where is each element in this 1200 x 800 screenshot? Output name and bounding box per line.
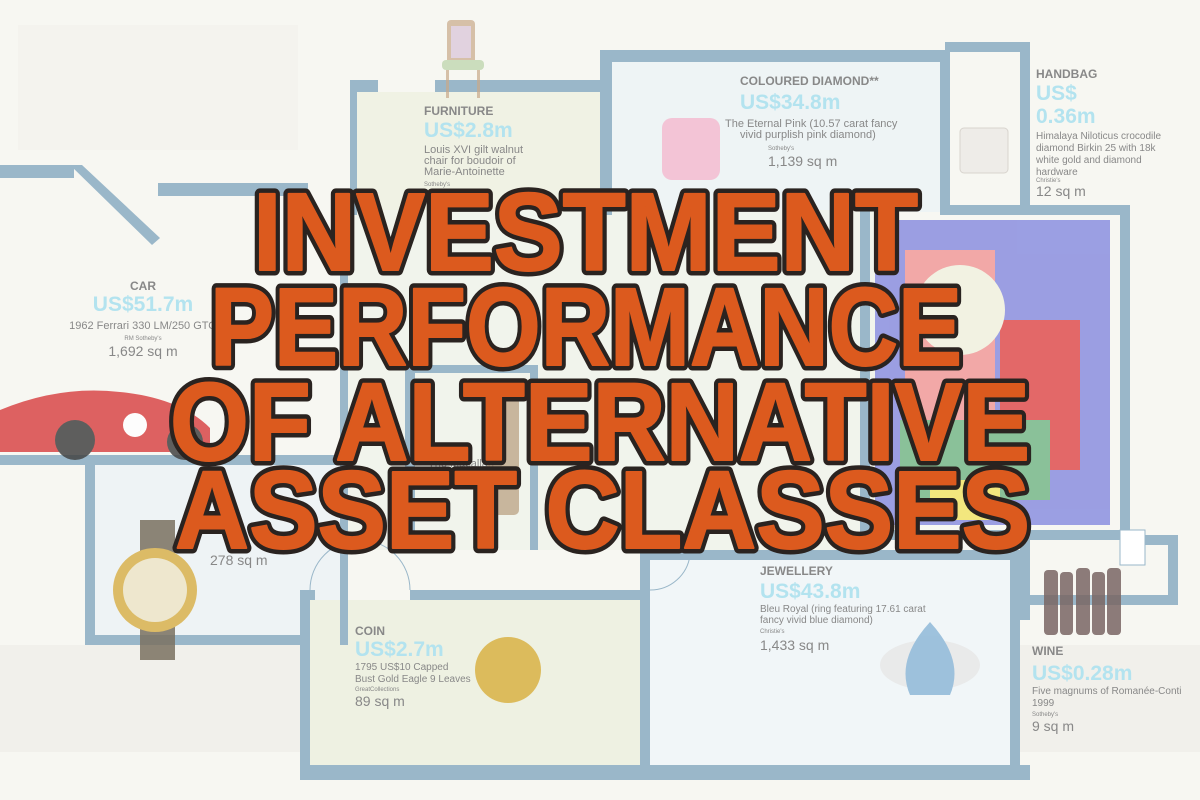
text: jewellery: Bleu Royal (ring featuring 17.61 carat <box>760 604 926 615</box>
title: PERFORMANCE <box>210 266 962 389</box>
text: coin: 89 sq m <box>355 693 405 709</box>
title: OF ALTERNATIVE <box>170 361 1030 484</box>
text: coloured diamond: COLOURED DIAMOND** <box>740 74 879 88</box>
text: furniture: chair for boudoir of <box>424 155 517 167</box>
text: jewellery: 1,433 sq m <box>760 637 829 653</box>
text: wine: Sotheby's <box>1032 712 1058 718</box>
icon: pink diamond <box>662 118 720 180</box>
text: handbag: diamond Birkin 25 with 18k <box>1036 143 1157 154</box>
text: car: 1,692 sq m <box>108 343 178 359</box>
text: wine: Five magnums of Romanée-Conti <box>1032 686 1182 697</box>
title: OF ALTERNATIVE <box>170 361 1030 484</box>
text: car: RM Sotheby's <box>124 336 162 342</box>
text: handbag: white gold and diamond <box>1035 155 1142 166</box>
icon: coin <box>475 637 541 703</box>
icon: chair <box>442 20 484 98</box>
title: ASSET CLASSES <box>175 449 1030 572</box>
text: handbag: US$ <box>1036 82 1077 105</box>
text: jewellery: JEWELLERY <box>760 564 833 578</box>
text: coin: US$2.7m <box>355 638 444 661</box>
text: wine: 1999 <box>1032 698 1055 709</box>
text: jewellery: US$43.8m <box>760 580 860 603</box>
text: coin <box>355 624 471 709</box>
text: furniture: Louis XVI gilt walnut <box>424 144 523 156</box>
image: picasso <box>875 220 1110 525</box>
title <box>170 171 1030 572</box>
text: car <box>69 279 217 359</box>
icon: car <box>0 390 210 460</box>
text: coloured diamond: Sotheby's <box>768 146 794 152</box>
title: ASSET CLASSES <box>175 449 1030 572</box>
text: coloured diamond: The Eternal Pink (10.57 carat fancy <box>725 118 898 130</box>
icon: handbag <box>960 128 1008 173</box>
text: coin: 1795 US$10 Capped <box>355 662 448 673</box>
text: car: CAR <box>130 279 156 293</box>
text: car: US$51.7m <box>93 293 193 316</box>
icon: whisky bottle <box>487 385 519 515</box>
text: coloured diamond: US$34.8m <box>740 91 840 114</box>
text: furniture: FURNITURE <box>424 104 493 118</box>
text: wine: WINE <box>1032 644 1063 658</box>
text: wine: US$0.28m <box>1032 662 1132 685</box>
text: coloured diamond: 1,139 sq m <box>768 153 837 169</box>
text: coloured diamond: vivid purplish pink diamond) <box>740 129 876 141</box>
text: handbag: hardware <box>1036 167 1078 178</box>
text: handbag: Himalaya Niloticus crocodile <box>1036 131 1161 142</box>
text: handbag: Christie's <box>1036 178 1060 184</box>
title: PERFORMANCE <box>210 266 962 389</box>
text: jewellery: Christie's <box>760 629 784 635</box>
text: handbag: 12 sq m <box>1036 183 1086 199</box>
text: furniture: Sotheby's <box>424 182 450 188</box>
text: whisky: The Macallan <box>428 458 494 470</box>
text: coin: GreatCollections <box>355 687 399 693</box>
title: INVESTMENT <box>253 171 918 294</box>
text: car: 1962 Ferrari 330 LM/250 GTO <box>69 320 217 332</box>
icon: wine bottles <box>1044 568 1121 635</box>
text: jewellery <box>760 564 926 653</box>
text: coloured diamond <box>725 74 898 169</box>
text: furniture: Marie-Antoinette <box>424 166 505 178</box>
text: watch: 278 sq m <box>210 552 268 568</box>
title: INVESTMENT <box>253 171 918 294</box>
text: handbag: 0.36m <box>1036 105 1096 128</box>
text: handbag <box>1035 67 1161 199</box>
text: furniture <box>424 104 523 188</box>
icon: blue diamond <box>880 622 980 695</box>
text: furniture: US$2.8m <box>424 119 513 142</box>
text: coin: COIN <box>355 624 385 638</box>
text: wine: 9 sq m <box>1032 718 1074 734</box>
text: coin: Bust Gold Eagle 9 Leaves <box>355 674 471 685</box>
icon: watch <box>113 520 197 660</box>
text: wine <box>1032 644 1182 734</box>
text: handbag: HANDBAG <box>1036 67 1097 81</box>
text: jewellery: fancy vivid blue diamond) <box>760 615 873 626</box>
